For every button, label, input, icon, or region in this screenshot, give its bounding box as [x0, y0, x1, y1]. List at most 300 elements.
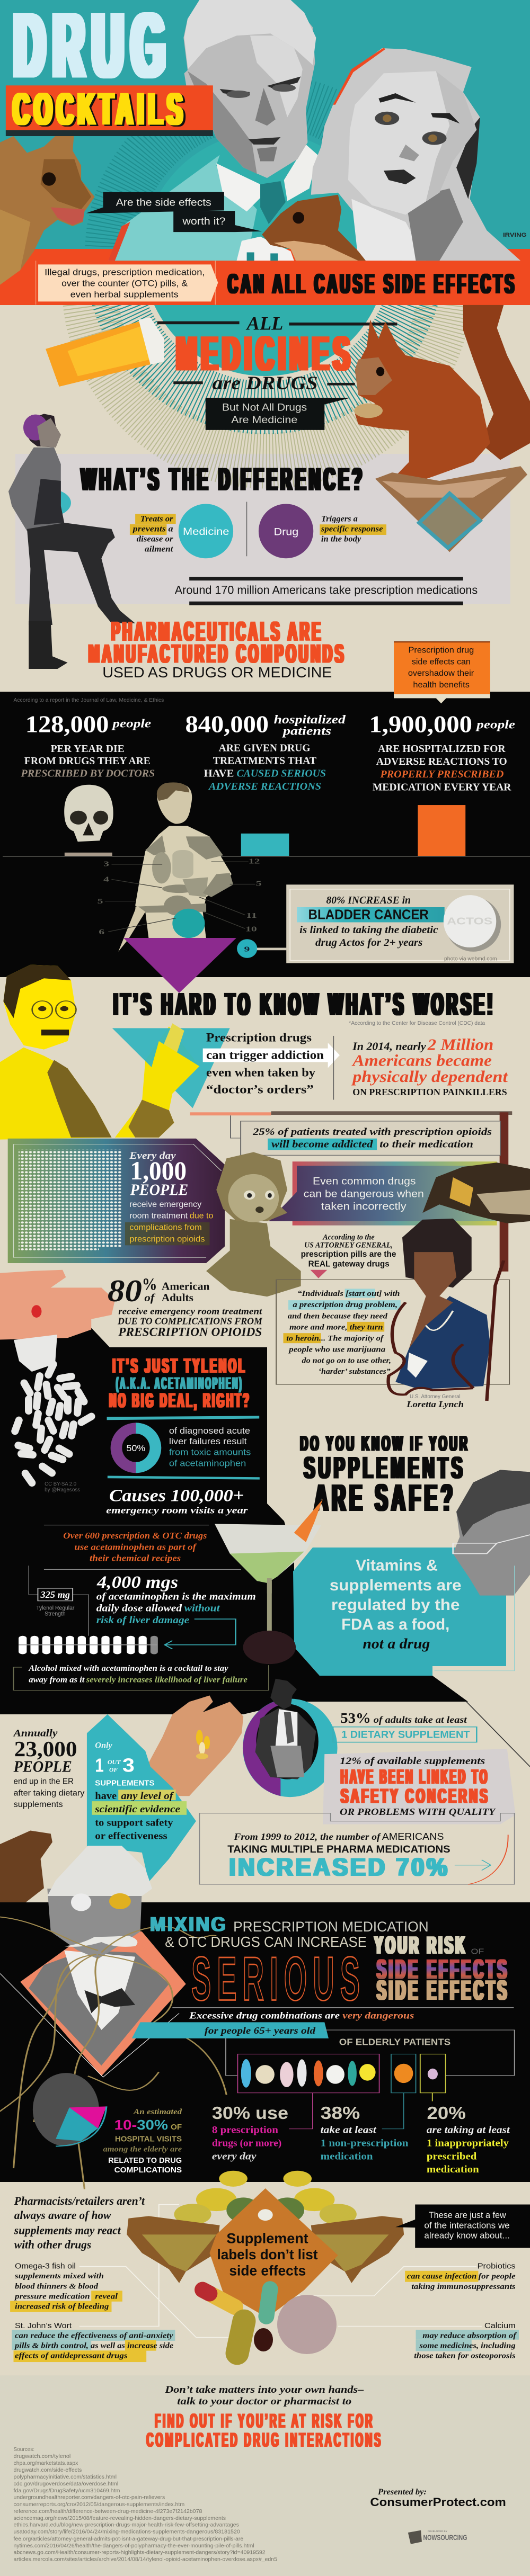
- stat: 80 percent: [108, 1274, 263, 1339]
- text: pharmacists continued: [14, 2224, 121, 2251]
- teal vitamins panel: [293, 1548, 506, 1676]
- stat: 80 percent: Adults: [162, 1291, 193, 1304]
- stat: 840,000 patients: HAVE: [204, 767, 234, 779]
- teal arrow panel: 3: [122, 1755, 135, 1776]
- image credit: by @Ragesoss: [45, 1487, 80, 1492]
- sources list: ethics.harvard.edu/blog/new-prescription-drugs-major-health-risk-few-offsetting-advantages: [14, 2522, 239, 2528]
- text: pharmacists aware: Pharmacists/retailers aren’t: [14, 2195, 145, 2207]
- colourful supplement pills: [192, 2279, 337, 2367]
- text: liver failures: liver failures result: [169, 1436, 247, 1446]
- stat: 840,000 patients: patients: [281, 724, 331, 738]
- stat: 23,000 people: [13, 1727, 85, 1809]
- image credit: CC BY-SA 2.0: [45, 1481, 76, 1487]
- presented by: [370, 2487, 506, 2509]
- text: prescription addiction: [206, 1031, 324, 1096]
- call to action: [146, 2384, 383, 2451]
- stat: 38 percent: medication: [321, 2150, 373, 2162]
- stat: 4,000 mgs: risk of liver damage: [96, 1614, 189, 1625]
- teal arrow panel: SUPPLEMENTS: [95, 1779, 154, 1787]
- drug definition: in the body: [321, 534, 361, 543]
- teal arrow panel: Only: [95, 1740, 112, 1750]
- anatomy labels: 4: [103, 875, 109, 883]
- Loretta Lynch portrait: [395, 1219, 490, 1389]
- sources list: Sources:: [14, 2446, 34, 2452]
- text: prescription addiction: even when taken by: [206, 1066, 316, 1079]
- stat: 4,000 mgs: 4,000 mgs: [96, 1572, 178, 1591]
- drug definition: Drug: [274, 526, 298, 538]
- stat: 10-30 percent hospital visits: An estimated: [132, 2107, 182, 2116]
- nowsourcing logo: NOWSOURCING: [423, 2533, 467, 2542]
- stat: 53 percent: 53%: [340, 1710, 371, 1727]
- donut with man in hat: [243, 1679, 338, 1797]
- lower background: [0, 2375, 530, 2576]
- speech bubble: common drugs: [269, 1161, 497, 1226]
- hand with pills: [149, 1695, 243, 1796]
- stat: 30 percent: [212, 2104, 288, 2162]
- interaction: omega-3: increased risk of bleeding: [15, 2302, 109, 2311]
- stat: 840,000 patients: TREATMENTS THAT: [213, 755, 316, 766]
- anatomy labels: 10: [245, 925, 257, 933]
- bladder cancer callout: BLADDER CANCER: [308, 907, 429, 922]
- stat: 23,000 people: end up in the ER: [14, 1777, 74, 1786]
- text: prescription addiction: can trigger addiction: [206, 1048, 324, 1062]
- interaction: omega-3: reveal: [95, 2292, 118, 2301]
- image credit: [45, 1481, 80, 1492]
- text: attorney general: prescription pills are the: [301, 1250, 396, 1259]
- stat: 25 percent addicted: to their medication: [379, 1139, 473, 1150]
- speech bubble: not all drugs: Are Medicine: [231, 414, 297, 426]
- interaction: st johns wort: can reduce the effectiveness of anti-anxiety: [15, 2331, 173, 2340]
- panel: increased 70 percent: AMERICANS: [382, 1832, 444, 1842]
- text: attorney general: REAL gateway drugs: [308, 1259, 390, 1268]
- teal arrow panel: OUT: [108, 1759, 121, 1766]
- vitamins statement: supplements are: [330, 1577, 462, 1594]
- title: COCKTAILS banner: [6, 84, 213, 136]
- interaction: omega-3: [10, 2261, 122, 2312]
- panel: increased 70 percent: From 1999 to 2012, the number of: [234, 1832, 382, 1842]
- interaction: omega-3: supplements mixed with: [14, 2271, 104, 2280]
- stat: 2 million americans: [351, 1035, 508, 1097]
- medicine definition: ailment: [145, 544, 173, 553]
- text: liver failures: of diagnosed acute: [169, 1426, 250, 1436]
- interaction: probiotics: can cause infection: [407, 2272, 476, 2281]
- interaction: calcium: [414, 2321, 519, 2360]
- interaction: st johns wort: effects of antidepressant drugs: [15, 2351, 127, 2360]
- stat: 38 percent: 1 non-prescription: [321, 2137, 408, 2149]
- stat: 53 percent: [333, 1710, 476, 1742]
- heading: pharmaceuticals are manufactured compounds: USED AS DRUGS OR MEDICINE: [102, 664, 332, 681]
- cocktail glass: [215, 1499, 323, 1594]
- hero panel: [0, 0, 527, 285]
- stat: 170 million americans: [175, 577, 478, 605]
- panel: every day 1,000 people: receive emergency: [129, 1200, 201, 1209]
- text: attorney general: US ATTORNEY GENERAL,: [304, 1241, 393, 1249]
- vitamins statement: regulated by the: [331, 1596, 460, 1614]
- text: prescription addiction: Prescription drugs: [206, 1031, 312, 1044]
- bird: [422, 1162, 530, 1223]
- bladder cancer callout: [286, 884, 514, 963]
- portrait caption: Loretta Lynch: [406, 1399, 464, 1409]
- yellow flowers: [174, 2171, 357, 2225]
- black tylenol region: [0, 1328, 468, 1714]
- text: excessive combinations: very dangerous: [342, 2010, 414, 2021]
- pill boxes: [237, 2054, 446, 2093]
- diagonal crack line: [466, 1702, 530, 1767]
- interaction: omega-3: blood thinners & blood: [15, 2282, 99, 2291]
- heading: pharmaceuticals are manufactured compounds: [89, 616, 346, 681]
- stat: 4,000 mgs: [96, 1572, 256, 1625]
- stat: 10-30 percent hospital visits: HOSPITAL VISITS: [115, 2135, 182, 2143]
- stat: 128,000 people: 128,000: [25, 711, 109, 738]
- stat: 4,000 mgs: of acetaminophen is the maximum: [96, 1591, 256, 1602]
- sources list: fee.org/articles/attorney-general-admits-pot-isnt-a-gateway-drug-but-that-prescription-pills-are: [14, 2536, 243, 2542]
- medicine definition: [130, 504, 233, 558]
- cream label: even herbal supplements: [70, 290, 179, 299]
- bladder cancer callout: ACTOS: [447, 916, 492, 927]
- stat: 38 percent: 38%: [321, 2104, 360, 2123]
- text: over 600 drugs: [63, 1531, 207, 1563]
- quote box: ‘harder’ substances”: [319, 1367, 391, 1376]
- black mixing section background: [0, 1902, 530, 2182]
- anatomy labels: 5: [256, 879, 262, 887]
- teal arrow panel: scientific evidence: [94, 1803, 180, 1815]
- teal arrow panel: have: [95, 1790, 117, 1802]
- vitamins statement: FDA as a food,: [341, 1616, 449, 1633]
- sources list: chpa.org/marketstats.aspx: [14, 2460, 78, 2466]
- teal banner: [132, 2022, 329, 2038]
- quote box: [276, 1280, 509, 1384]
- teal arrow panel: to support safety: [95, 1817, 173, 1828]
- photo credit: photo via webmd.com: [444, 956, 497, 962]
- stat: 10-30 percent hospital visits: [103, 2107, 182, 2175]
- stat: 840,000 patients: hospitalized: [274, 713, 346, 726]
- text: over 600 drugs: use acetaminophen as part of: [74, 1542, 197, 1552]
- sources list: usatoday.com/story/life/2016/04/24/mixing-medications-supplements-dangerous/83181520: [14, 2529, 240, 2535]
- red vine pole: [388, 1260, 504, 1401]
- label: supplement labels: side effects: [229, 2263, 306, 2279]
- stat: 80 percent: %: [142, 1274, 157, 1294]
- callout: prescription side effects: overshadow their: [408, 669, 474, 678]
- teal arrow panel: any level of: [121, 1790, 174, 1802]
- icon: white pill: [258, 2209, 273, 2221]
- spilled white pills: [10, 1335, 96, 1488]
- label: supplement labels: Supplement: [226, 2230, 308, 2247]
- stat: 10-30 percent hospital visits: 30%: [137, 2117, 168, 2133]
- sources list: undergroundhealthreporter.com/dangers-of-otc-pain-relievers: [14, 2494, 165, 2500]
- mixing section: [0, 1846, 515, 2225]
- arrow: [165, 1619, 236, 1649]
- stat: 25 percent addicted: will become addicted: [271, 1139, 374, 1150]
- interaction: st johns wort: St. John’s Wort: [15, 2321, 72, 2330]
- sources list: polypharmacyinitiative.com/statistics.html: [14, 2474, 117, 2480]
- heading: mixing increases risk: & OTC DRUGS CAN INCREASE: [165, 1934, 367, 1950]
- fox: [0, 128, 95, 285]
- glasses man head: [453, 1470, 530, 1596]
- vitamins statement: not a drug: [363, 1636, 430, 1652]
- bladder cancer callout: 80% INCREASE in: [326, 894, 411, 906]
- medicine definition: disease or: [137, 534, 173, 543]
- stat: 840,000 patients: ARE GIVEN DRUG: [219, 742, 311, 754]
- stat: 1,900,000 people: people: [475, 718, 515, 731]
- anatomy labels: 11: [246, 911, 257, 919]
- tylenol 325 mg label: [29, 1566, 89, 1636]
- interaction: omega-3: Omega-3 fish oil: [15, 2261, 76, 2270]
- medicine definition: Treats or: [140, 514, 173, 523]
- anatomy labels: 6: [99, 928, 104, 936]
- anatomy labels: 12: [249, 857, 260, 865]
- donut chart: 50 percent: [111, 1423, 161, 1473]
- pharmaceuticals heading panel: [3, 616, 530, 963]
- panel: every day 1,000 people: Every day: [129, 1150, 176, 1161]
- stat: 80 percent: PRESCRIPTION OPIOIDS: [118, 1325, 262, 1339]
- quote box: more and more, they turn: [289, 1323, 383, 1331]
- sources list: cdc.gov/drugoverdose/data/overdose.html: [14, 2481, 118, 2486]
- stat: 20 percent: medication: [427, 2163, 479, 2175]
- teal arrow panel: 1: [95, 1755, 104, 1776]
- alcohol warning box: [14, 1663, 269, 1690]
- purple inverted triangle: [123, 938, 236, 993]
- hero teal background: [0, 0, 530, 262]
- sources list: articles.mercola.com/sites/articles/archive/2014/08/14/tylenol-opioid-acetaminophen-overdose.aspx#_edn5: [14, 2556, 277, 2562]
- callout: prescription side effects: [394, 641, 490, 703]
- panel: every day 1,000 people: [8, 1139, 225, 1263]
- quote box: people who use marijuana: [288, 1345, 385, 1354]
- heading: all medicines are drugs: [157, 312, 397, 393]
- stat: 38 percent: [321, 2104, 408, 2162]
- text: liver failures: of acetaminophen: [169, 1458, 246, 1468]
- stat: 53 percent: of adults take at least: [374, 1714, 467, 1725]
- stat: 23,000 people: PEOPLE: [13, 1757, 72, 1775]
- drug definition: [259, 504, 386, 558]
- stat: 10-30 percent hospital visits: OF: [171, 2123, 182, 2132]
- bladder cancer callout: is linked to taking the diabetic: [299, 924, 438, 935]
- man illustration: [108, 0, 318, 261]
- anatomy marker 9: [237, 939, 287, 958]
- icon: skull: [64, 785, 113, 842]
- speech bubble: common drugs: taken incorrectly: [321, 1200, 407, 1212]
- hand with red pill: [0, 1270, 115, 1339]
- label: of elderly patients: OF ELDERLY PATIENTS: [339, 2037, 450, 2047]
- sources list: abcnews.go.com/Health/consumer-reports-highlights-dietary-supplement-dangers/story?id=40919592: [14, 2550, 266, 2555]
- branch divider: [190, 1111, 512, 1272]
- bladder cancer callout: drug Actos for 2+ years: [315, 936, 422, 949]
- black stats section background: [0, 692, 530, 977]
- speech bubble: are the side effects: Are the side effects: [116, 196, 211, 208]
- alcohol warning box: Alcohol mixed with acetaminophen is a cocktail to stay: [28, 1663, 228, 1672]
- text: over 600 drugs: their chemical recipes: [90, 1553, 181, 1563]
- squirrel peeking: [262, 195, 366, 261]
- stat: 23,000 people: Annually: [13, 1727, 58, 1739]
- flexing man: [8, 414, 135, 625]
- text: attorney general: [301, 1233, 396, 1268]
- interaction: omega-3: pressure medication: [14, 2292, 90, 2301]
- text: excessive combinations: Excessive drug combinations are: [189, 2010, 340, 2021]
- stat: 23,000 people: supplements: [14, 1800, 63, 1809]
- teal outline: [435, 1566, 515, 1671]
- doctor in yellow: [0, 965, 199, 1140]
- call to action: Don’t take matters into your own hands–: [164, 2384, 364, 2395]
- portrait caption: [406, 1393, 464, 1409]
- woman illustration: [236, 48, 520, 261]
- sources list: consumerreports.org/cro/2012/05/dangerous-supplements/index.htm: [14, 2501, 184, 2507]
- medicine definition: Medicine: [183, 525, 229, 537]
- quote and tylenol section: IT’S JUST TYLENOL: [112, 1354, 247, 1377]
- quote and tylenol section: [0, 1219, 509, 1570]
- nowsourcing logo: DEVELOPED BY: [428, 2530, 447, 2533]
- lavender difference panel: [15, 454, 510, 604]
- tylenol 325 mg label: Strength: [45, 1611, 66, 1617]
- stat: 38 percent: take at least: [321, 2124, 377, 2135]
- cream label: Illegal drugs, prescription medication,: [45, 267, 205, 277]
- interaction: probiotics: for people: [478, 2272, 516, 2281]
- text: prescription addiction: “doctor’s orders”: [206, 1083, 314, 1096]
- cream label: over the counter (OTC) pills, &: [61, 279, 188, 288]
- text: pharmacists aware: [14, 2195, 145, 2222]
- speech box: known interactions: [395, 2205, 530, 2248]
- drug definition: Triggers a: [321, 514, 358, 523]
- text: pharmacists continued: supplements may react: [14, 2224, 121, 2237]
- stat: 1,900,000 people: [369, 711, 515, 793]
- drug definition: specific response: [321, 524, 383, 533]
- sources list: drugwatch.com/side-effects: [14, 2467, 82, 2473]
- anatomy labels: 5: [98, 897, 103, 905]
- text: liver failures: from toxic amounts: [169, 1447, 251, 1457]
- donut chart: 50 percent: 50%: [127, 1443, 145, 1453]
- stat: 80 percent: American: [162, 1280, 209, 1292]
- stat: 128,000 people: people: [111, 717, 151, 730]
- call to action: talk to your doctor or pharmacist to: [177, 2396, 351, 2407]
- sources list: sciencemag.org/news/2015/08/feature-revealing-hidden-dangers-dietary-supplements: [14, 2515, 226, 2521]
- stat: 2 million americans: 2 Million: [427, 1035, 493, 1053]
- vitamins statement: [330, 1557, 462, 1652]
- panel: every day 1,000 people: due to: [190, 1211, 213, 1220]
- stat: 4,000 mgs: without: [184, 1602, 220, 1614]
- man's lower leg: [29, 621, 68, 669]
- medicine definition: prevents a: [132, 524, 173, 533]
- icon: pill bottle: [46, 318, 164, 387]
- stat: 23,000 people: 23,000: [14, 1737, 77, 1761]
- pie chart: hospital visits: [33, 2073, 107, 2146]
- teal arrow panel: [87, 1714, 196, 1882]
- callout: prescription side effects: Prescription drug: [408, 646, 474, 655]
- heading: mixing increases risk: MIXING: [150, 1913, 227, 1936]
- nowsourcing logo: [408, 2530, 467, 2544]
- quote box: a prescription drug problem,: [293, 1301, 398, 1309]
- tylenol 325 mg label: Tylenol Regular: [36, 1605, 74, 1611]
- anatomy labels: 3: [103, 860, 109, 867]
- text: pharmacists aware: always aware of how: [14, 2209, 111, 2222]
- stat: 2 million americans: In 2014, nearly: [352, 1040, 426, 1052]
- stat: 10-30 percent hospital visits: among the elderly are: [103, 2145, 182, 2153]
- interaction: st johns wort: [12, 2321, 175, 2362]
- teal banner: for people 65+ years old: [205, 2026, 316, 2036]
- portrait caption: U.S. Attorney General: [410, 1393, 461, 1399]
- stat: 30 percent: every day: [212, 2150, 257, 2162]
- presented by: Presented by:: [377, 2487, 427, 2497]
- stat: 840,000 patients: CAUSED SERIOUS: [236, 767, 326, 779]
- glass stem and base: [243, 1578, 296, 1664]
- anatomy marker 9: 9: [244, 945, 250, 953]
- supplements section upper: [215, 1470, 530, 1596]
- stat: 128,000 people: PRESCRIBED BY DOCTORS: [21, 767, 155, 779]
- stat: 10-30 percent hospital visits: COMPLICATIONS: [114, 2166, 182, 2175]
- pill row: [19, 1636, 158, 1654]
- stat: 30 percent: 30% use: [212, 2104, 288, 2123]
- stat: causes 100,000: [106, 1486, 248, 1516]
- stat: 10-30 percent hospital visits: RELATED TO DRUG: [108, 2156, 182, 2165]
- panel: 12 percent safety concerns: [323, 1749, 516, 1824]
- speech bubble: worth it: worth it?: [182, 215, 225, 227]
- teal arrow panel: OF: [109, 1767, 118, 1774]
- text: attorney general: According to the: [322, 1233, 375, 1241]
- anatomy figure: [118, 782, 233, 952]
- leader lines: [80, 2205, 482, 2337]
- panel: every day 1,000 people: 1,000: [130, 1157, 187, 1185]
- quote box: “Individuals [start out] with: [297, 1290, 400, 1298]
- pointer triangle: [311, 1270, 327, 1278]
- stat: 25 percent addicted: [241, 1121, 500, 1155]
- text: over 600 drugs: Over 600 prescription & OTC drugs: [63, 1531, 207, 1541]
- stat: 80 percent: 80: [108, 1274, 142, 1309]
- vitamins statement: Vitamins &: [356, 1557, 438, 1574]
- quote box: and then because they need: [288, 1312, 388, 1320]
- tylenol dosage section: [0, 1557, 530, 1907]
- label: supplement labels: labels don’t list: [217, 2247, 318, 2262]
- speech bubble: common drugs: can be dangerous when: [304, 1188, 424, 1200]
- interaction: probiotics: [405, 2261, 516, 2291]
- orange strip: side effect statement: [32, 261, 530, 305]
- panel: every day 1,000 people: PEOPLE: [130, 1180, 188, 1198]
- callout: prescription side effects: health benefits: [413, 680, 470, 690]
- alcohol warning box: severely increases likelihood of liver failure: [86, 1675, 248, 1684]
- cream label: [38, 264, 218, 301]
- closing section: [0, 2188, 530, 2576]
- teal triangle: [112, 1028, 230, 1108]
- stat: 840,000 patients: ADVERSE REACTIONS: [208, 780, 321, 792]
- panel: every day 1,000 people: prescription opioids: [129, 1235, 205, 1244]
- speech bubble: worth it: [173, 211, 262, 232]
- all medicines are drugs panel: [8, 305, 530, 625]
- teal arrow panel: or effectiveness: [95, 1830, 167, 1841]
- fish pair: [127, 2216, 404, 2283]
- callout: prescription side effects: side effects can: [412, 657, 471, 666]
- stat: 4,000 mgs: daily dose allowed: [96, 1602, 182, 1614]
- bar chart: [3, 805, 530, 856]
- panel: every day 1,000 people: room treatment: [129, 1211, 188, 1220]
- icon: bark with frog diamond: [375, 466, 527, 552]
- stat: 840,000 patients: [186, 711, 346, 792]
- stat: 128,000 people: FROM DRUGS THEY ARE: [24, 755, 151, 766]
- stat: 80 percent: DUE TO COMPLICATIONS FROM: [117, 1316, 263, 1327]
- stat: 10-30 percent hospital visits: 10-: [114, 2117, 137, 2133]
- hard to know section: [0, 939, 530, 1296]
- speech bubble: not all drugs: [206, 398, 351, 430]
- stat: 840,000 patients: 840,000: [186, 711, 269, 738]
- heading: all medicines are drugs: ALL: [245, 312, 283, 334]
- heading: all medicines are drugs: are DRUGS: [213, 372, 318, 393]
- speech bubble: are the side effects: [86, 192, 224, 213]
- icon: bottle in hand: [145, 1023, 199, 1094]
- stat: 128,000 people: PER YEAR DIE: [51, 743, 125, 754]
- stat: 80 percent: of: [144, 1291, 156, 1304]
- quote box: do not go on to use other,: [302, 1356, 391, 1365]
- interaction: st johns wort: pills & birth control, as well as increase side: [14, 2341, 173, 2350]
- alcohol warning box: away from as it: [29, 1675, 85, 1684]
- root tendrils: [0, 1917, 226, 2189]
- quote box: to heroin... The majority of: [286, 1334, 384, 1343]
- text: pharmacists continued: with other drugs: [14, 2238, 91, 2251]
- stat: 20 percent: 20%: [427, 2104, 466, 2123]
